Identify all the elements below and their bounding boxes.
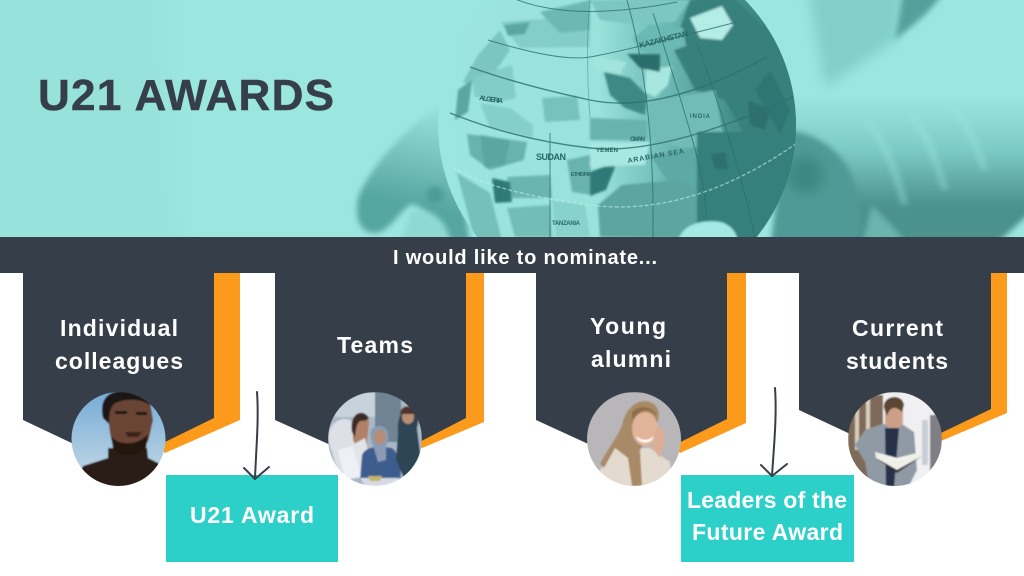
header bar with nominate prompt (0, 237, 1024, 273)
globe country labels: KAZAKHSTAN (638, 29, 689, 50)
award box: Leaders of the Future Award: Future Award (692, 519, 843, 545)
globe country labels: SUDAN (536, 152, 566, 162)
panel: current students (799, 272, 991, 455)
panel: individual colleagues (23, 272, 214, 465)
arrow to U21 Award (244, 392, 269, 479)
globe country labels: ALGERIA (479, 95, 503, 105)
award box: U21 Award (166, 475, 338, 562)
panel: young alumni: Young (590, 313, 666, 339)
right hand and sleeve (770, 0, 1024, 260)
portrait: student reading a book (848, 392, 942, 488)
left hand (357, 108, 470, 245)
globe country labels (479, 29, 711, 227)
panel: individual colleagues: colleagues (55, 348, 183, 374)
globe country labels: ETHIOPIA (571, 172, 591, 178)
panel: young alumni (536, 272, 727, 465)
award box: U21 Award: U21 Award (190, 502, 314, 528)
globe (438, 0, 796, 237)
globe country labels: OMAN (630, 137, 645, 143)
globe country labels: YEMEN (596, 148, 618, 154)
panel: teams (275, 272, 466, 465)
globe country labels: TANZANIA (552, 221, 581, 227)
globe country labels: ARABIAN SEA (627, 148, 684, 165)
header bar with nominate prompt: I would like to nominate... (393, 247, 657, 269)
globe country labels: INDIA (690, 114, 711, 120)
landmasses (455, 0, 800, 240)
category panel: orange accents (150, 273, 1007, 453)
panel: current students: Current (852, 315, 943, 341)
photo banner: hands holding a globe (0, 0, 1024, 237)
portrait: man in black turtleneck (70, 390, 167, 490)
award box: Leaders of the Future Award: Leaders of the (687, 487, 847, 513)
panel: individual colleagues: Individual (60, 315, 178, 341)
title: U21 AWARDS (38, 71, 334, 120)
portrait: team around a laptop (328, 392, 422, 486)
panel: current students: students (846, 348, 948, 374)
award box: Leaders of the Future Award (681, 475, 854, 562)
panel: young alumni: alumni (591, 346, 671, 372)
globe grid (450, 0, 793, 240)
arrow to Leaders of the Future Award (761, 388, 787, 476)
portrait: smiling blonde woman (586, 392, 682, 490)
panel: teams: Teams (337, 332, 413, 358)
fingertip under globe (678, 221, 738, 240)
